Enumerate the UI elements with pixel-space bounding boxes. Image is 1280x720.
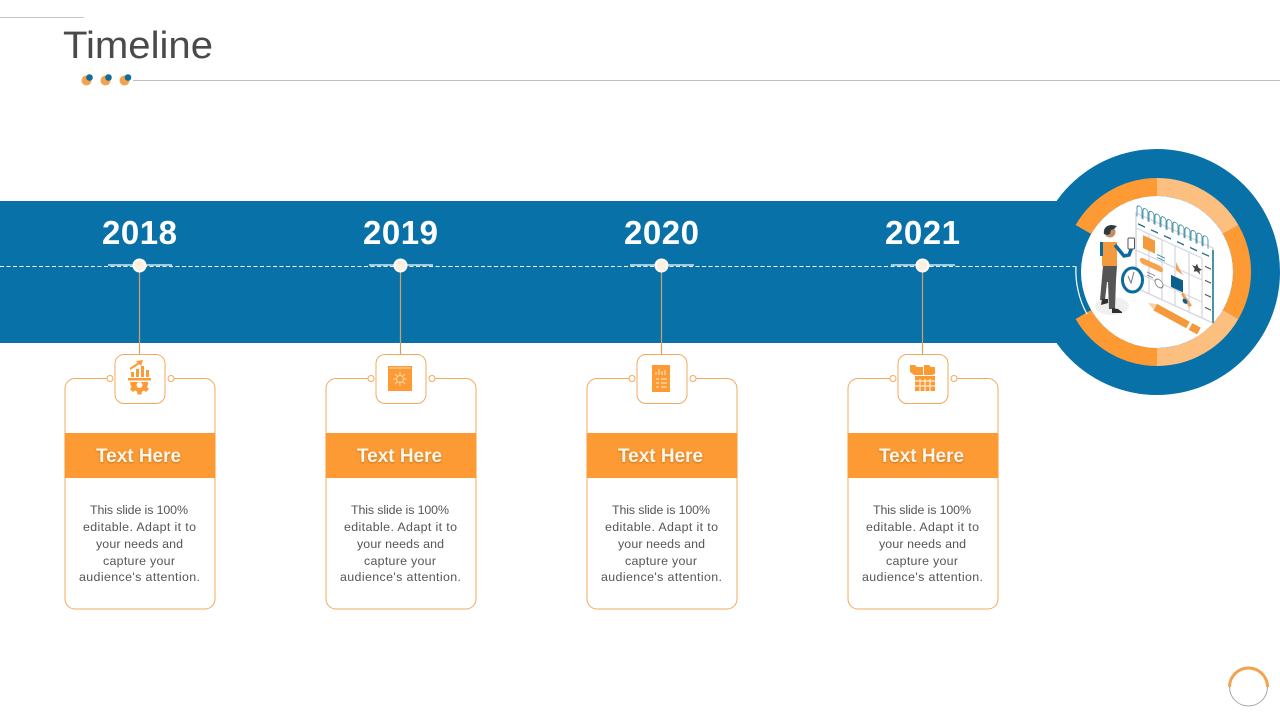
card body text: audience's attention. — [79, 570, 200, 584]
year: 2019 — [363, 214, 438, 251]
timeline band — [0, 201, 1070, 343]
column: 2021 — [848, 214, 998, 609]
card header — [848, 433, 998, 478]
card: Text Here — [357, 446, 442, 467]
card body text: editable. Adapt it to — [866, 520, 979, 534]
card body text: capture your — [625, 554, 697, 568]
card body text: your needs and — [96, 537, 183, 551]
icon: folders and table — [898, 354, 948, 404]
timeline node — [656, 260, 668, 272]
card body text — [79, 503, 200, 584]
card body text — [601, 503, 722, 584]
illustration: clock — [1122, 268, 1142, 292]
card body text: editable. Adapt it to — [83, 520, 196, 534]
card body text: editable. Adapt it to — [605, 520, 718, 534]
year: 2018 — [102, 214, 177, 251]
corner progress ring — [1230, 668, 1268, 706]
calendar medallion — [1034, 149, 1280, 395]
card header — [326, 433, 476, 478]
card header — [64, 433, 216, 478]
card: Text Here — [879, 446, 964, 467]
card — [586, 376, 738, 609]
card body text: This slide is 100% — [612, 503, 710, 517]
card body text: audience's attention. — [862, 570, 983, 584]
column: 2018 — [64, 214, 216, 609]
card body text — [340, 503, 461, 584]
card body text: capture your — [103, 554, 175, 568]
segmented orange ring — [1083, 187, 1242, 357]
dashed timeline axis — [0, 266, 1075, 268]
column: 2019 — [326, 214, 476, 609]
column: 2020 — [586, 214, 738, 609]
illustration: pencil — [1148, 303, 1199, 331]
card — [326, 376, 476, 609]
card body text: your needs and — [618, 537, 705, 551]
card — [848, 376, 998, 609]
illustration: person — [1095, 225, 1134, 315]
icon: growth gear — [115, 354, 165, 404]
card body text: your needs and — [879, 537, 966, 551]
icon: framed chip — [376, 354, 426, 404]
card header — [586, 433, 738, 478]
card: Text Here — [618, 446, 703, 467]
card body text: capture your — [364, 554, 436, 568]
title: Timeline — [63, 25, 213, 67]
icon: report sheet — [637, 354, 687, 404]
title dots — [82, 74, 131, 86]
timeline node — [134, 260, 146, 272]
card body text: This slide is 100% — [873, 503, 971, 517]
white centre — [1081, 196, 1233, 348]
illustration: wall calendar — [1136, 204, 1214, 323]
card body text — [862, 503, 983, 584]
medallion blue disc — [1034, 149, 1280, 395]
card body text: audience's attention. — [340, 570, 461, 584]
card body text: capture your — [886, 554, 958, 568]
left white arc — [1076, 266, 1087, 314]
year: 2020 — [624, 214, 699, 251]
card — [64, 376, 216, 609]
timeline node — [394, 260, 406, 272]
card body text: your needs and — [357, 537, 444, 551]
timeline node — [916, 260, 928, 272]
year: 2021 — [885, 214, 960, 251]
card body text: editable. Adapt it to — [344, 520, 457, 534]
card body text: This slide is 100% — [351, 503, 449, 517]
card: Text Here — [96, 446, 181, 467]
card body text: audience's attention. — [601, 570, 722, 584]
card body text: This slide is 100% — [90, 503, 188, 517]
